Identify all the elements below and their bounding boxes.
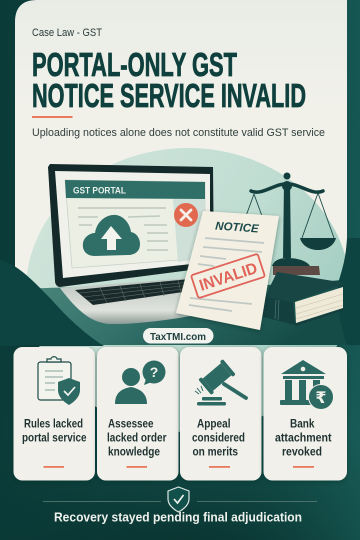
card: appeal considered on merits xyxy=(180,347,262,480)
card text xyxy=(275,418,332,458)
footer divider left xyxy=(43,501,161,502)
title: PORTAL-ONLY GST xyxy=(32,46,237,83)
scales of justice xyxy=(246,172,336,275)
card text: attachment xyxy=(275,432,332,444)
footer divider right xyxy=(197,501,317,502)
card accent xyxy=(126,466,147,468)
card text: lacked order xyxy=(107,432,167,444)
card: rules lacked portal service xyxy=(14,347,95,480)
laptop screen xyxy=(55,171,210,278)
card: assessee lacked order knowledge xyxy=(97,347,178,480)
icon: bank with rupee: ₹ xyxy=(315,390,327,407)
card text: Assessee xyxy=(108,418,154,430)
icon: clipboard with shield xyxy=(38,357,80,405)
website pill: TaxTMI.com xyxy=(150,331,206,343)
card text: portal service xyxy=(22,432,86,444)
icon: footer shield xyxy=(168,487,189,512)
mint backdrop xyxy=(26,148,350,432)
card text: Rules lacked xyxy=(24,418,83,430)
card text: considered xyxy=(192,432,245,444)
portal window xyxy=(65,180,205,268)
law book xyxy=(262,272,346,326)
card: bank attachment revoked xyxy=(264,347,347,480)
invalid stamp: INVALID xyxy=(197,260,260,295)
card text xyxy=(107,418,167,458)
hero panel xyxy=(15,0,350,432)
title accent bar xyxy=(32,116,72,118)
icon: gavel xyxy=(195,359,246,406)
card text: knowledge xyxy=(108,446,160,458)
subtitle: Uploading notices alone does not constitute valid GST service xyxy=(32,127,325,139)
dark corner swoosh xyxy=(0,260,104,346)
title xyxy=(32,46,306,114)
card accent xyxy=(293,466,314,468)
card text: revoked xyxy=(282,446,322,458)
laptop illustration xyxy=(48,164,245,324)
card text: Bank xyxy=(290,418,315,430)
keyboard xyxy=(75,279,190,305)
case label: Case Law - GST xyxy=(32,27,102,39)
card text xyxy=(22,418,86,444)
card text xyxy=(192,418,245,458)
desk surface xyxy=(25,280,347,345)
right dark edge xyxy=(338,238,360,345)
card text: on merits xyxy=(192,446,238,458)
laptop lid xyxy=(48,164,214,287)
website pill xyxy=(143,328,214,344)
laptop base xyxy=(60,278,245,324)
card accent xyxy=(44,466,64,468)
icon: cloud upload xyxy=(83,215,140,256)
notice document xyxy=(176,211,279,330)
portal heading: GST PORTAL xyxy=(73,186,126,196)
footer statement: Recovery stayed pending final adjudication xyxy=(54,510,302,524)
card accent xyxy=(209,466,230,468)
card text: Appeal xyxy=(197,418,230,430)
icon: error cross xyxy=(174,203,198,227)
icon: person with question bubble: ? xyxy=(150,364,158,380)
notice heading: NOTICE xyxy=(215,220,259,236)
